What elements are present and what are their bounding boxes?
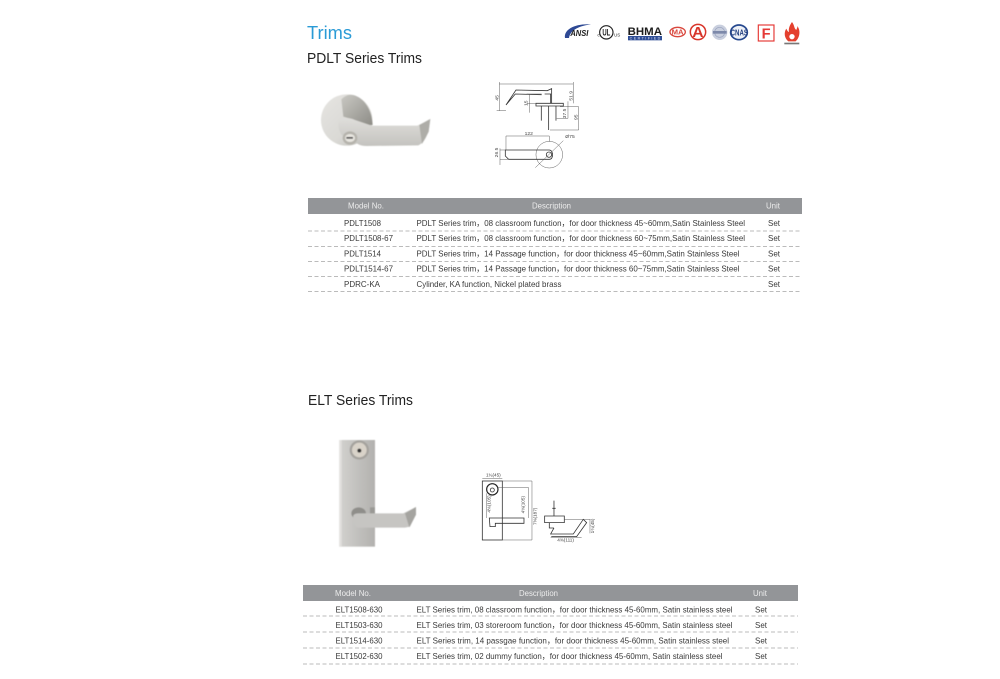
row: ELT1502-630: ELT Series trim, 02 dummy function，for door thickness 45-60mm, Satin stainless steel xyxy=(416,651,723,661)
icon: BHMA logo: BHMA xyxy=(628,26,662,38)
table header: Model No. xyxy=(335,588,371,598)
row: ELT1514-630: Set xyxy=(755,636,768,646)
row: PDLT1514-67: PDLT1514-67 xyxy=(344,264,393,274)
drawing: PDLT dimensions: 15 xyxy=(524,100,530,106)
row: ELT1502-630: ELT1502-630 xyxy=(336,651,383,661)
table header: Description xyxy=(519,588,558,598)
drawing: PDLT dimensions xyxy=(494,82,579,168)
row: ELT1503-630: ELT1503-630 xyxy=(336,620,383,630)
row: ELT1514-630: ELT Series trim, 14 passgae function，for door thickness 45-60mm, Satin stainless steel xyxy=(416,636,729,646)
drawing: PDLT dimensions: 45 xyxy=(495,95,501,101)
table header: Description xyxy=(532,200,571,210)
icon: BHMA logo: CERTIFIED xyxy=(630,37,661,41)
drawing: PDLT dimensions: 122 xyxy=(525,131,533,137)
title: Trims xyxy=(307,22,352,43)
drawing: ELT dimensions xyxy=(482,472,595,543)
drawing: PDLT dimensions: 51.9 xyxy=(569,91,575,101)
drawing: ELT dimensions: 1¾(45) xyxy=(486,472,501,477)
table: ELT models xyxy=(303,585,798,664)
row: PDLT1508-67: Set xyxy=(768,233,781,243)
icon: UL listed logo: UL xyxy=(602,28,611,38)
table header: Unit xyxy=(766,200,781,210)
drawing: ELT dimensions: 4⅛(105) xyxy=(521,496,526,513)
table header xyxy=(303,585,798,601)
row: PDLT1508: PDLT1508 xyxy=(344,218,381,228)
icon: CAL logo xyxy=(690,24,706,41)
table header xyxy=(308,198,802,214)
icon: UL listed logo: c xyxy=(597,32,600,38)
icon: UL listed logo: US xyxy=(614,32,620,37)
row: ELT1508-630: ELT Series trim, 08 classroom function，for door thickness 45-60mm, Satin stainless steel xyxy=(416,604,733,614)
drawing: PDLT dimensions: 95 xyxy=(573,114,579,120)
drawing: ELT dimensions: 4⅜(111) xyxy=(557,538,574,543)
table: PDLT models xyxy=(308,198,802,292)
icon: flame xyxy=(784,22,799,44)
row: ELT1502-630: Set xyxy=(755,651,768,661)
row: PDRC-KA: Cylinder, KA function, Nickel plated brass xyxy=(416,279,562,289)
row: PDLT1514-67: Set xyxy=(768,264,781,274)
table header: Model No. xyxy=(348,200,384,210)
drawing: PDLT dimensions: 26.5 xyxy=(494,147,500,157)
icon: CNAS logo xyxy=(731,25,748,40)
table header: Unit xyxy=(753,588,768,598)
row: ELT1508-630: ELT1508-630 xyxy=(336,604,383,614)
icon: CAL logo: A xyxy=(692,25,704,41)
row: PDRC-KA: PDRC-KA xyxy=(344,279,380,289)
row: PDLT1508: PDLT Series trim，08 classroom function，for door thickness 45~60mm,Satin Stainless Steel xyxy=(416,218,745,228)
row: ELT1503-630: ELT Series trim, 03 storeroom function，for door thickness 45-60mm, Satin stainless steel xyxy=(416,620,733,630)
row: ELT1514-630: ELT1514-630 xyxy=(336,636,383,646)
row: PDLT1508: Set xyxy=(768,218,781,228)
drawing: ELT dimensions: 4⅛(105) xyxy=(487,495,492,513)
row: PDLT1514: Set xyxy=(768,248,781,258)
row: PDRC-KA xyxy=(344,279,781,289)
heading: PDLT Series Trims: PDLT Series Trims xyxy=(307,51,422,67)
icon: CMA logo: MA xyxy=(672,28,684,37)
drawing: PDLT dimensions: 37.5 xyxy=(562,108,568,118)
icon: round seal xyxy=(712,25,727,40)
photo: PDLT lever trim xyxy=(321,94,430,146)
certification logos xyxy=(565,22,799,44)
row: PDLT1508-67: PDLT Series trim，08 classroom function，for door thickness 60~75mm,Satin Stainless Steel xyxy=(416,233,745,243)
drawing: PDLT dimensions: Ø75 xyxy=(565,134,575,140)
photo: ELT lever trim xyxy=(339,440,416,547)
drawing: ELT dimensions: 7⅜(187) xyxy=(533,507,538,525)
icon: F fire rating: F xyxy=(762,26,771,42)
row: PDLT1514: PDLT1514 xyxy=(344,248,381,258)
row: PDLT1514-67: PDLT Series trim，14 Passage function，for door thickness 60~75mm,Satin Stainless Steel xyxy=(416,264,740,274)
row: PDLT1508-67: PDLT1508-67 xyxy=(344,233,393,243)
icon: F fire rating xyxy=(758,25,774,42)
heading: ELT Series Trims: ELT Series Trims xyxy=(308,393,413,409)
icon: CNAS logo: CNAS xyxy=(731,28,748,37)
icon: ANSI logo xyxy=(565,24,591,38)
row: PDRC-KA: Set xyxy=(768,279,781,289)
row: ELT1508-630: Set xyxy=(755,604,768,614)
row: PDLT1514: PDLT Series trim，14 Passage function，for door thickness 45~60mm,Satin Stainless Steel xyxy=(416,248,740,258)
drawing: ELT dimensions: 1¾(45) xyxy=(590,518,595,533)
icon: ANSI logo: ANSI xyxy=(569,28,589,38)
icon: UL listed logo xyxy=(597,26,620,39)
row: ELT1503-630: Set xyxy=(755,620,768,630)
